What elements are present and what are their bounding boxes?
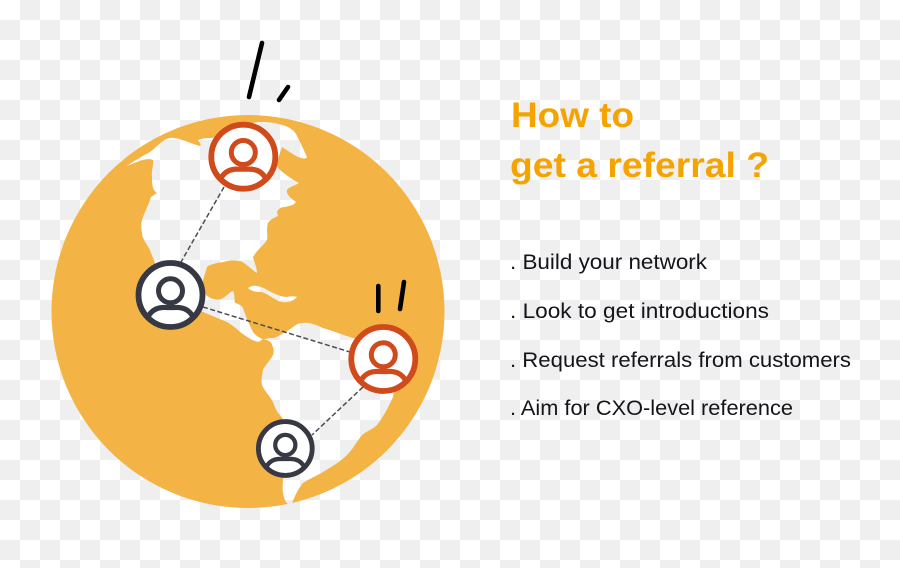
list of referral tips: . Aim for CXO-level reference [510, 396, 793, 420]
land: South America [262, 323, 400, 504]
list of referral tips: . Look to get introductions [510, 299, 769, 323]
dashed connection: marker 2 to marker 3 [203, 307, 350, 352]
title: get a referral ? [510, 146, 769, 185]
land: North and Central America [127, 122, 307, 342]
ocean disc [52, 115, 444, 508]
title [510, 96, 769, 185]
list of referral tips: . Build your network [510, 250, 707, 274]
land: Cuba [248, 286, 297, 302]
list of referral tips [510, 250, 851, 420]
emphasis ticks above top marker [249, 43, 288, 100]
icon: dark person, Pacific [138, 263, 202, 327]
icon: dark person, southern [258, 422, 312, 475]
title: How to [511, 96, 634, 135]
emphasis ticks above right marker [378, 282, 404, 311]
dashed connection: marker 1 to marker 2 [181, 187, 224, 262]
list of referral tips: . Request referrals from customers [510, 348, 851, 372]
dashed connection: marker 3 to marker 4 [312, 387, 363, 435]
globe [52, 115, 444, 508]
icon: orange person, South America [351, 327, 415, 391]
icon: orange person, North America [211, 125, 275, 189]
